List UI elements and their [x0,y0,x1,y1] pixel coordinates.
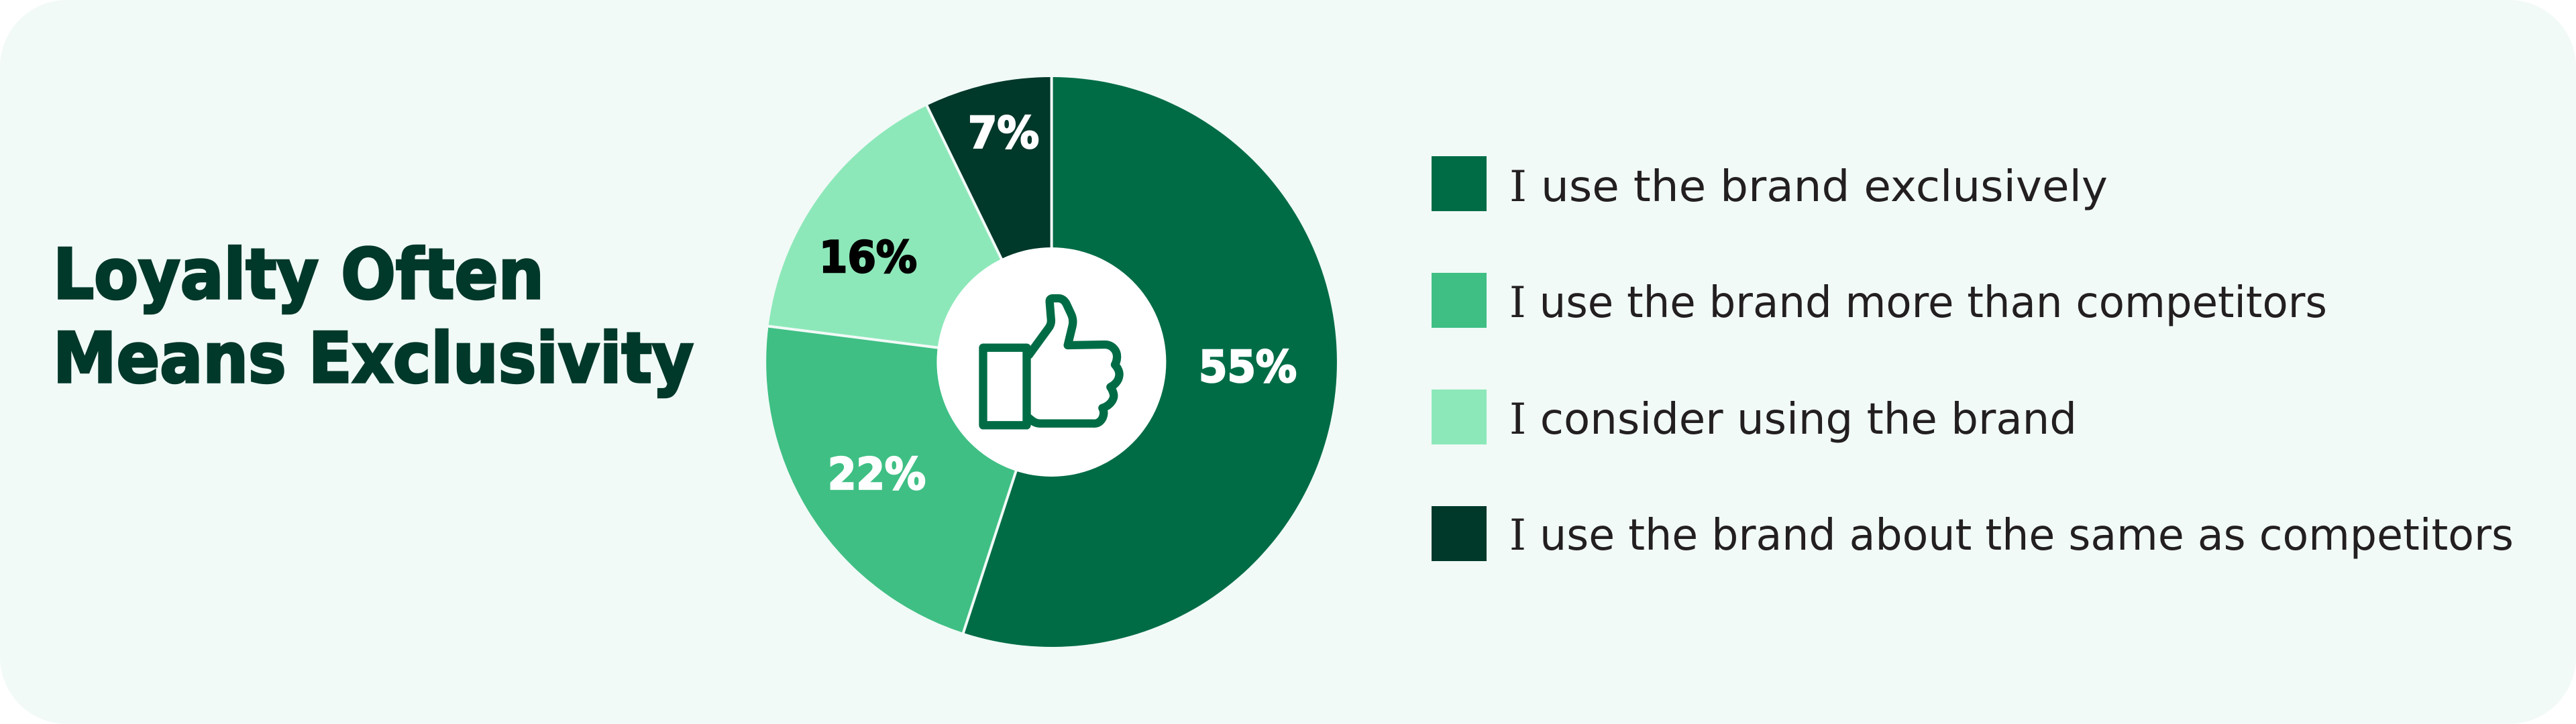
segment: 16% consider [769,106,1052,362]
legend item: exclusive: I use the brand exclusively [1509,162,2108,212]
title: Means Exclusivity [53,318,694,399]
label: 22%: 22% [828,449,926,500]
title: Loyalty Often [53,235,544,315]
title [53,235,694,399]
label: 16%: 16% [819,233,917,283]
label: 55%: 55% [1199,342,1297,393]
legend item: consider: I consider using the brand [1509,395,2077,444]
legend item: same as competitors: I use the brand about the same as competitors [1509,511,2514,560]
segment dividers [767,76,1052,634]
segment: 7% same as competitors [927,77,1052,362]
segment: 55% exclusive [963,77,1337,647]
legend [1432,156,2514,561]
centre hole [936,247,1166,477]
segment: 22% more than competitors [766,326,1052,633]
label: 7%: 7% [968,109,1039,158]
legend item: more than competitors: I use the brand more than competitors [1509,278,2327,328]
icon: thumbs up [983,298,1120,425]
donut chart [766,76,1337,647]
